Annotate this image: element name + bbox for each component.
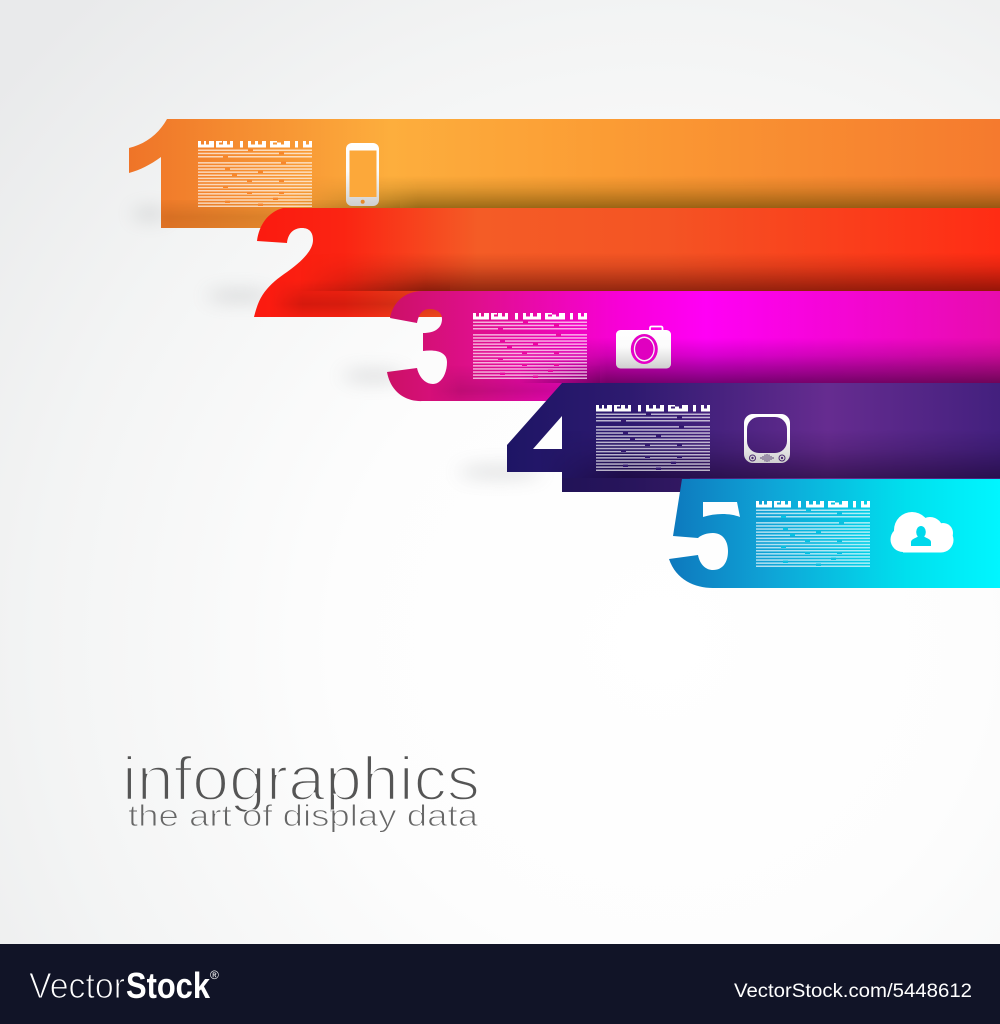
logo: VectorStock: ® (210, 968, 219, 982)
ribbon shading 2 (270, 253, 1000, 317)
panel: band 5 (cyan) (669, 479, 1000, 588)
text block 4 (596, 405, 710, 471)
panel: band 3 (magenta) (387, 291, 1000, 402)
ribbon shading 1 (161, 180, 1000, 228)
logo: VectorStock: Stock (126, 965, 211, 1006)
logo: VectorStock: Vector (29, 965, 125, 1006)
icon: retro tv (744, 414, 790, 463)
text block 1 (198, 141, 312, 207)
subheading: the art of display data (128, 798, 479, 833)
ribbon shading 4 (560, 440, 1000, 492)
numeral 2 and ribbon (254, 208, 1000, 317)
soft cast shadows on background (132, 208, 542, 478)
icon: smartphone (346, 143, 379, 206)
panel: band 4 (purple) (507, 383, 1000, 492)
icon: camera (616, 326, 671, 368)
heading: infographics: infographics (122, 745, 480, 814)
numeral 3 and ribbon (387, 291, 1000, 401)
image id: VectorStock.com/5448612 (734, 981, 972, 1002)
ribbon shading 3 (430, 338, 1000, 402)
numeral 5 and ribbon (669, 479, 1000, 588)
icon: cloud with person (890, 512, 954, 552)
footer bar (0, 944, 1000, 1024)
numeral 4 and ribbon (507, 383, 1000, 492)
panel: band 1 (orange) (120, 119, 1000, 228)
panel: band 2 (red) (254, 208, 1000, 317)
logo: VectorStock (29, 965, 219, 1006)
numeral 1 and ribbon (129, 119, 1000, 228)
title (122, 745, 480, 833)
text block 5 (756, 501, 870, 567)
text block 3 (473, 313, 587, 379)
